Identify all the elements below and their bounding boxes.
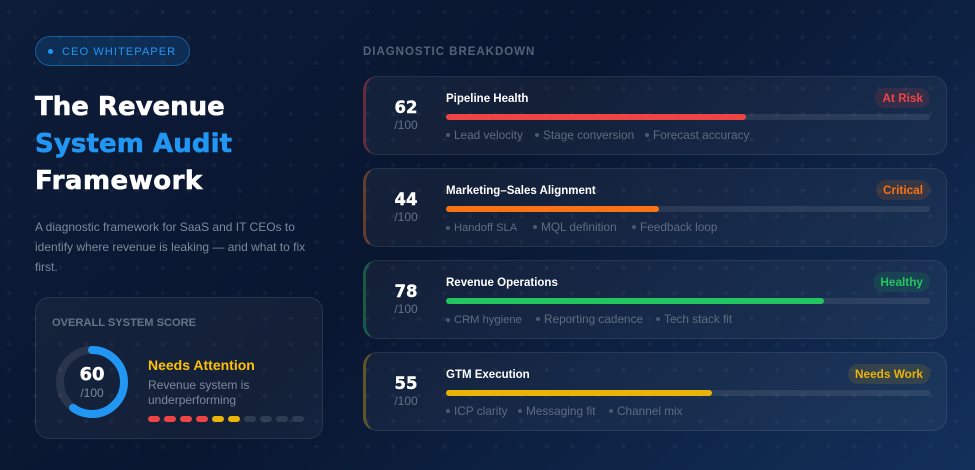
- panel: Marketing-Sales Alignment: MQL definition: [541, 220, 617, 234]
- panel: Pipeline Health: /100: [394, 118, 418, 132]
- panel: Marketing-Sales Alignment: Marketing–Sales Alignment: [446, 185, 596, 197]
- panel: GTM Execution: [363, 352, 947, 431]
- panel: GTM Execution: /100: [394, 394, 418, 408]
- panel: Revenue Operations: /100: [394, 302, 418, 316]
- panel: Marketing-Sales Alignment: 44: [395, 190, 417, 209]
- section heading: DIAGNOSTIC BREAKDOWN: [363, 46, 535, 58]
- ring score value: 60: [79, 364, 105, 385]
- panel: Revenue Operations: [363, 260, 947, 339]
- panel: Revenue Operations: CRM hygiene: [454, 314, 522, 326]
- panel: Marketing-Sales Alignment: /100: [394, 210, 418, 224]
- panel: Revenue Operations: 78: [395, 282, 417, 301]
- panel: GTM Execution: 55: [395, 374, 417, 393]
- title: System Audit: [35, 128, 232, 158]
- title: The Revenue: [35, 92, 225, 122]
- panel: overall system score: [35, 297, 323, 439]
- panel: Marketing-Sales Alignment: Handoff SLA: [454, 222, 517, 234]
- panel: Marketing-Sales Alignment: Feedback loop: [640, 220, 717, 234]
- panel: Pipeline Health: Forecast accuracy: [653, 128, 749, 142]
- title: [34, 92, 232, 196]
- score segment meter: [148, 416, 304, 422]
- panel: GTM Execution: Needs Work: [855, 367, 923, 381]
- chart: score ring: [56, 346, 128, 418]
- panel: Pipeline Health: Stage conversion: [543, 128, 634, 142]
- panel: Revenue Operations: Revenue Operations: [446, 277, 558, 289]
- panel: Marketing-Sales Alignment: Critical: [883, 183, 923, 197]
- panel: Revenue Operations: Reporting cadence: [544, 312, 643, 326]
- panel: GTM Execution: Messaging fit: [526, 404, 596, 418]
- badge: CEO Whitepaper: CEO WHITEPAPER: [62, 46, 176, 58]
- panel: GTM Execution: Channel mix: [617, 404, 683, 418]
- score panel heading: OVERALL SYSTEM SCORE: [52, 317, 196, 329]
- score status description: Revenue system is underperforming: [148, 378, 249, 407]
- title: Framework: [35, 166, 203, 196]
- panel: Pipeline Health: Lead velocity: [454, 128, 523, 142]
- panel: GTM Execution: ICP clarity: [454, 404, 508, 418]
- score status: Needs Attention: [148, 357, 255, 373]
- panel: Pipeline Health: At Risk: [882, 91, 923, 105]
- panel: Revenue Operations: Tech stack fit: [664, 312, 732, 326]
- panel: Revenue Operations: Healthy: [880, 275, 923, 289]
- badge: CEO Whitepaper: [35, 36, 190, 66]
- description: A diagnostic framework for SaaS and IT CEOs to identify where revenue is leaking — and what to fix first.: [35, 220, 305, 274]
- panel: Marketing-Sales Alignment: [363, 168, 947, 247]
- panel: Pipeline Health: [363, 76, 947, 155]
- panel: Pipeline Health: Pipeline Health: [446, 93, 528, 105]
- panel: GTM Execution: GTM Execution: [446, 369, 530, 381]
- panel: Pipeline Health: 62: [395, 98, 417, 117]
- ring score denominator: /100: [80, 386, 104, 400]
